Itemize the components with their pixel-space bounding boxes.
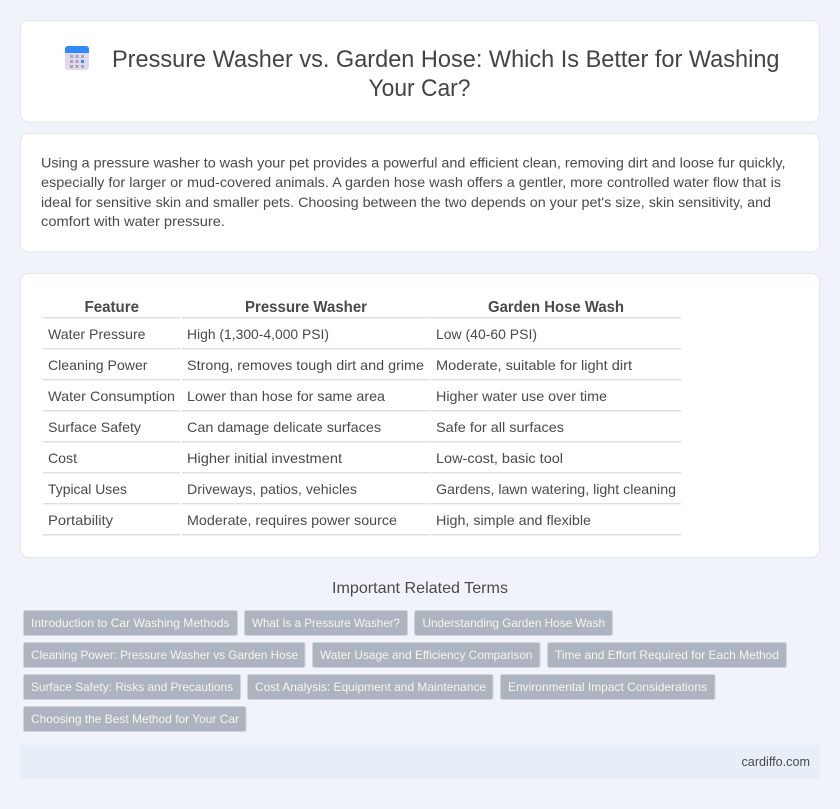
table row: water pressure: Low (40-60 PSI) bbox=[436, 326, 537, 342]
table row: surface safety: Surface Safety bbox=[48, 419, 141, 435]
tag: understanding garden hose wash bbox=[414, 610, 612, 636]
table row: portability: High, simple and flexible bbox=[436, 512, 591, 528]
tag: understanding garden hose wash: Understanding Garden Hose Wash bbox=[422, 616, 605, 630]
table row: cleaning power bbox=[43, 357, 681, 380]
tag: what is a pressure washer: What Is a Pressure Washer? bbox=[252, 616, 400, 630]
text block: introduction: ideal for sensitive skin and smaller pets. Choosing between the two depends on your pet's size, skin sensitivity, and bbox=[41, 194, 771, 210]
footer: cardiffo.com bbox=[742, 755, 810, 769]
tag: what is a pressure washer bbox=[244, 610, 408, 636]
table row: cleaning power: Moderate, suitable for light dirt bbox=[436, 357, 632, 373]
table row: portability bbox=[43, 512, 681, 536]
tag: surface safety bbox=[24, 674, 240, 700]
tag: choosing the best method: Choosing the Best Method for Your Car bbox=[31, 712, 239, 726]
table row: cleaning power: Strong, removes tough dirt and grime bbox=[187, 357, 424, 373]
title: Your Car? bbox=[368, 75, 470, 102]
tag: time and effort bbox=[548, 642, 786, 668]
tag: cleaning power: Cleaning Power: Pressure Washer vs Garden Hose bbox=[31, 648, 298, 662]
table row: typical uses: Gardens, lawn watering, light cleaning bbox=[436, 481, 676, 497]
table header row: Feature bbox=[84, 299, 139, 316]
heading: important related terms: Important Related Terms bbox=[332, 580, 508, 597]
table row: typical uses: Driveways, patios, vehicles bbox=[187, 481, 357, 497]
table row: surface safety: Can damage delicate surfaces bbox=[187, 419, 381, 435]
tag: surface safety: Surface Safety: Risks and Precautions bbox=[31, 680, 233, 694]
panel: header bbox=[20, 20, 820, 122]
table row: cost: Cost bbox=[48, 450, 77, 466]
table row: cost bbox=[43, 450, 681, 474]
icon: calendar bbox=[65, 46, 89, 70]
table row: typical uses bbox=[43, 481, 681, 504]
table header row bbox=[43, 299, 681, 318]
tag: cost analysis bbox=[248, 674, 493, 700]
table row: cost: Low-cost, basic tool bbox=[436, 450, 563, 466]
tag: introduction bbox=[24, 610, 238, 636]
table row: water consumption: Higher water use over time bbox=[436, 388, 607, 404]
tag: time and effort: Time and Effort Required for Each Method bbox=[555, 648, 779, 662]
title: Pressure Washer vs. Garden Hose: Which Is Better for Washing bbox=[112, 46, 780, 73]
panel: related term tags bbox=[24, 610, 786, 732]
table row: portability: Moderate, requires power source bbox=[187, 512, 397, 528]
text block: introduction: Using a pressure washer to wash your pet provides a powerful and efficient clean, removing dirt and loose fur quickly, bbox=[41, 154, 786, 170]
text block: introduction bbox=[41, 154, 786, 229]
tag: environmental impact: Environmental Impact Considerations bbox=[508, 680, 707, 694]
table row: water consumption bbox=[43, 388, 681, 412]
table header row: Garden Hose Wash bbox=[488, 299, 624, 316]
table row: water pressure: High (1,300-4,000 PSI) bbox=[187, 326, 329, 342]
table row: portability: Portability bbox=[48, 512, 113, 528]
table row: water pressure bbox=[43, 326, 681, 350]
text block: introduction: especially for larger or mud-covered animals. A garden hose wash offers a gentler, more controlled water flow that is bbox=[41, 174, 781, 190]
panel: introduction bbox=[20, 134, 820, 252]
tag: water usage: Water Usage and Efficiency Comparison bbox=[320, 648, 532, 662]
tag: water usage bbox=[312, 642, 540, 668]
text block: introduction: comfort with water pressure. bbox=[41, 213, 225, 229]
table row: water pressure: Water Pressure bbox=[48, 326, 146, 342]
title bbox=[112, 46, 780, 102]
table row: typical uses: Typical Uses bbox=[48, 481, 127, 497]
footer bbox=[20, 745, 820, 779]
table row: cost: Higher initial investment bbox=[187, 450, 342, 466]
tag: cleaning power bbox=[24, 642, 305, 668]
table row: surface safety bbox=[43, 419, 681, 442]
table header row: Pressure Washer bbox=[245, 299, 367, 316]
tag: environmental impact bbox=[500, 674, 715, 700]
panel: comparison table bbox=[20, 274, 820, 558]
table row: water consumption: Water Consumption bbox=[48, 388, 175, 404]
tag: introduction: Introduction to Car Washing Methods bbox=[31, 616, 230, 630]
tag: cost analysis: Cost Analysis: Equipment and Maintenance bbox=[255, 680, 486, 694]
table row: surface safety: Safe for all surfaces bbox=[436, 419, 564, 435]
table row: water consumption: Lower than hose for same area bbox=[187, 388, 385, 404]
tag: choosing the best method bbox=[24, 706, 246, 732]
table row: cleaning power: Cleaning Power bbox=[48, 357, 148, 373]
